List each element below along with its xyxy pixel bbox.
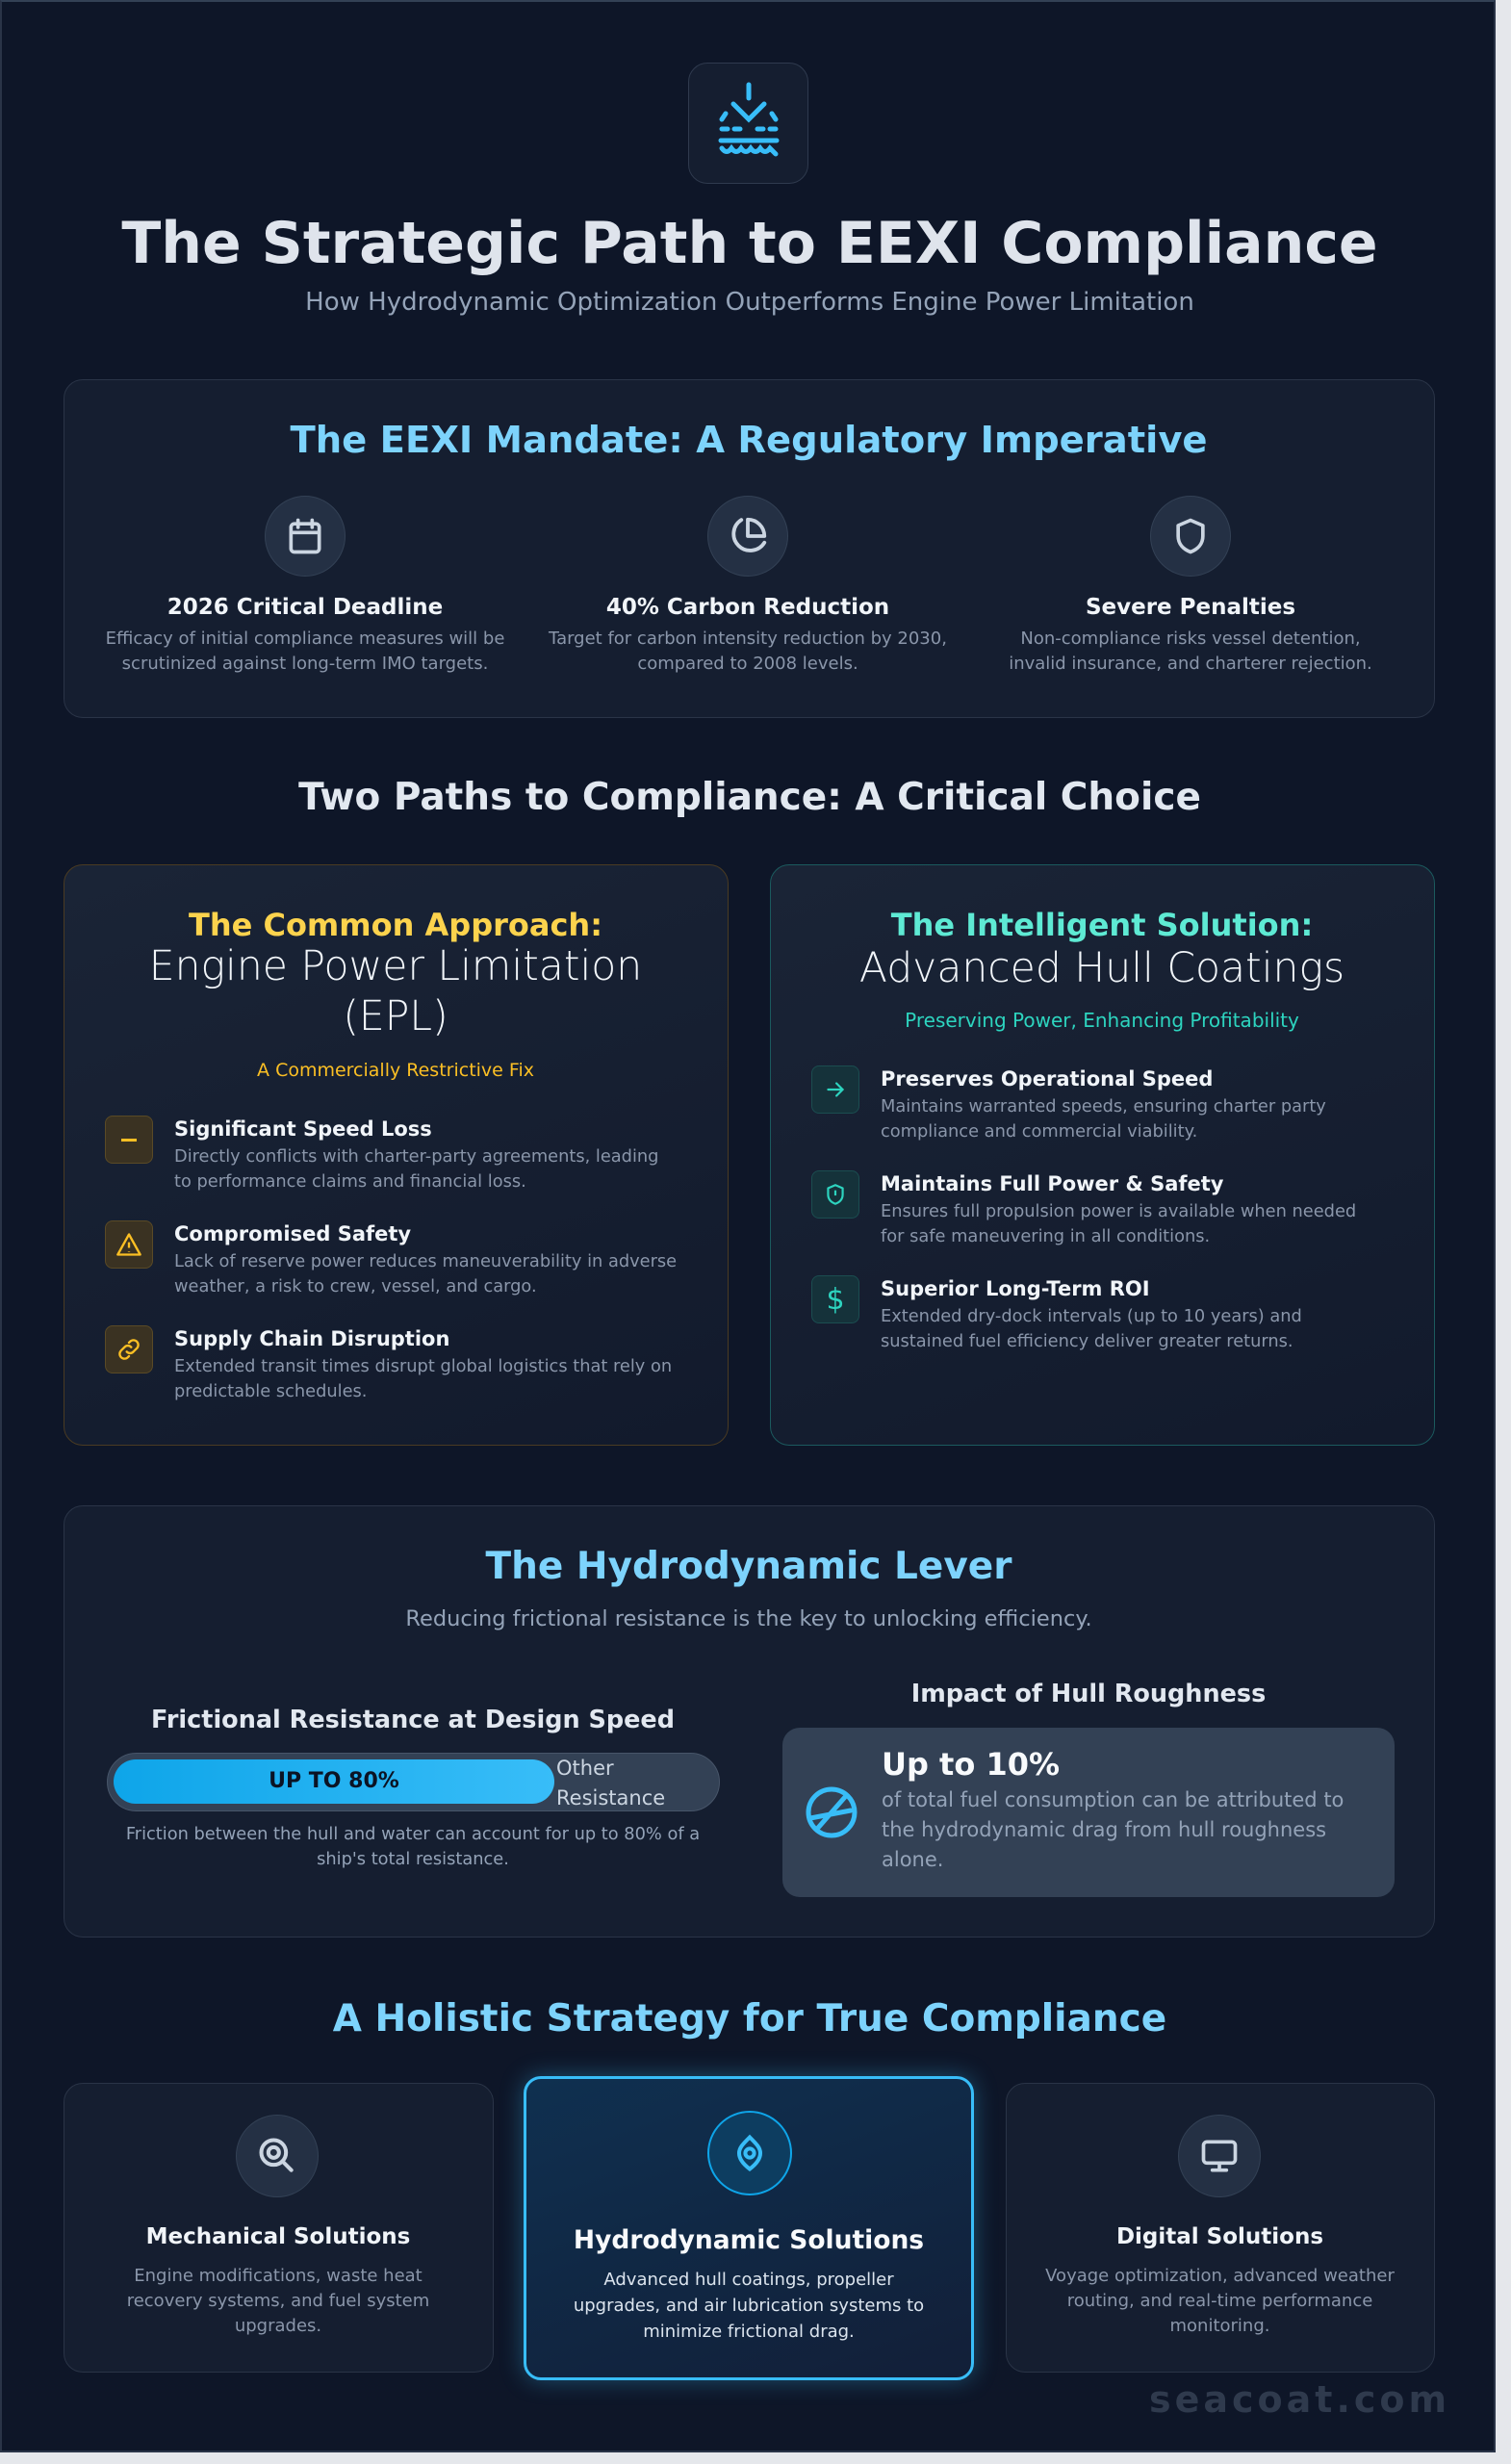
icon: dollar — [811, 1275, 859, 1323]
item: deadline: 2026 Critical Deadline — [167, 595, 443, 620]
item: carbon reduction: 40% Carbon Reduction — [606, 595, 889, 620]
chart: frictional resistance bar: Frictional Resistance at Design Speed — [151, 1706, 675, 1734]
item: speed: compliance and commercial viability. — [881, 1121, 1197, 1142]
item: speed: Maintains warranted speeds, ensuring charter party — [881, 1096, 1326, 1116]
panel: EPL: (EPL) — [343, 993, 448, 1040]
icon: slashed circle — [807, 1786, 857, 1838]
item: penalties: Non-compliance risks vessel detention, — [1020, 629, 1361, 649]
icon: shield — [811, 1170, 859, 1219]
item: power safety: Ensures full propulsion power is available when needed — [881, 1201, 1356, 1221]
item: supply chain: Extended transit times disrupt global logistics that rely on — [174, 1356, 672, 1376]
heading: two paths: Two Paths to Compliance: A Critical Choice — [298, 776, 1201, 819]
item: penalties — [1009, 496, 1372, 674]
card: hydrodynamic highlighted: Hydrodynamic Solutions — [574, 2225, 924, 2255]
icon: dollar: $ — [826, 1282, 845, 1317]
callout: hull roughness: alone. — [882, 1848, 943, 1871]
panel: EEXI mandate — [64, 379, 1435, 718]
item: safety: weather, a risk to crew, vessel, and cargo. — [174, 1276, 537, 1296]
item: safety: Compromised Safety — [174, 1222, 411, 1245]
panel: EPL: Engine Power Limitation — [149, 943, 642, 990]
icon: arrow — [811, 1065, 859, 1114]
panel: EPL: The Common Approach: — [189, 907, 602, 943]
item: supply chain: predictable schedules. — [174, 1381, 367, 1401]
item: carbon reduction: compared to 2008 levels. — [637, 654, 858, 674]
icon: warning — [105, 1220, 153, 1269]
panel: hull coatings: Advanced Hull Coatings — [859, 945, 1345, 992]
item: ROI: Extended dry-dock intervals (up to 10 years) and — [881, 1306, 1302, 1326]
panel: EPL — [64, 864, 729, 1446]
callout: hull roughness — [782, 1680, 1395, 1897]
card: mechanical: upgrades. — [235, 2316, 321, 2336]
card: digital: Digital Solutions — [1116, 2224, 1323, 2249]
item: safety: Lack of reserve power reduces maneuverability in adverse — [174, 1251, 677, 1271]
item: speed loss — [105, 1116, 658, 1192]
card: digital — [1006, 2083, 1435, 2373]
watermark: seacoat.com — [1149, 2378, 1450, 2421]
item: speed loss: Directly conflicts with charter-party agreements, leading — [174, 1146, 658, 1167]
heading: mandate: The EEXI Mandate: A Regulatory Imperative — [290, 419, 1208, 462]
item: supply chain: Supply Chain Disruption — [174, 1327, 449, 1350]
item: power safety: Maintains Full Power & Safety — [881, 1172, 1224, 1195]
chart: frictional resistance bar — [107, 1706, 720, 1869]
chart: frictional resistance bar: Resistance — [556, 1786, 665, 1810]
heading: holistic strategy: A Holistic Strategy for True Compliance — [333, 1997, 1166, 2040]
card: mechanical: Engine modifications, waste heat — [134, 2266, 423, 2286]
icon: search gear — [236, 2115, 319, 2197]
card: digital: routing, and real-time performance — [1067, 2291, 1372, 2311]
item: deadline — [106, 496, 504, 674]
chart: frictional resistance bar: UP TO 80% — [269, 1769, 399, 1793]
card: hydrodynamic highlighted — [524, 2076, 974, 2380]
subtitle: How Hydrodynamic Optimization Outperforms Engine Power Limitation — [305, 288, 1194, 317]
item: speed loss: to performance claims and financial loss. — [174, 1171, 526, 1192]
item: ROI — [811, 1275, 1302, 1351]
card: digital: monitoring. — [1170, 2316, 1269, 2336]
item: ROI: Superior Long-Term ROI — [881, 1277, 1150, 1300]
callout: hull roughness: the hydrodynamic drag from hull roughness — [882, 1818, 1326, 1841]
card: mechanical: recovery systems, and fuel system — [127, 2291, 429, 2311]
item: speed: Preserves Operational Speed — [881, 1067, 1213, 1091]
panel: hull coatings — [770, 864, 1435, 1446]
item: carbon reduction: Target for carbon intensity reduction by 2030, — [549, 629, 947, 649]
callout: hull roughness: Up to 10% — [882, 1746, 1060, 1783]
panel: hull coatings: Preserving Power, Enhancing Profitability — [905, 1009, 1299, 1032]
icon: calendar — [265, 496, 346, 577]
item: supply chain — [105, 1325, 672, 1401]
panel: hydrodynamic lever: The Hydrodynamic Lever — [486, 1545, 1012, 1588]
icon: shield — [1150, 496, 1231, 577]
callout: hull roughness: Impact of Hull Roughness — [911, 1680, 1266, 1708]
card: hydrodynamic highlighted: upgrades, and air lubrication systems to — [574, 2296, 924, 2316]
icon: hull logo — [688, 63, 808, 184]
icon: minus — [105, 1116, 153, 1164]
item: speed loss: Significant Speed Loss — [174, 1117, 432, 1141]
panel: hull coatings: The Intelligent Solution: — [891, 907, 1313, 943]
card: mechanical: Mechanical Solutions — [146, 2224, 410, 2249]
item: carbon reduction — [549, 496, 947, 674]
panel: hydrodynamic lever: Reducing frictional resistance is the key to unlocking efficiency. — [405, 1606, 1092, 1631]
callout: hull roughness: of total fuel consumption can be attributed to — [882, 1788, 1344, 1811]
item: power safety — [811, 1170, 1356, 1246]
panel: hydrodynamic lever — [64, 1505, 1435, 1938]
chart: frictional resistance bar: Friction between the hull and water can account for up to 80% of a — [126, 1824, 700, 1844]
icon: pie chart — [707, 496, 788, 577]
card: mechanical — [64, 2083, 494, 2373]
item: deadline: scrutinized against long-term IMO targets. — [122, 654, 488, 674]
panel: EPL: A Commercially Restrictive Fix — [257, 1060, 534, 1081]
card: hydrodynamic highlighted: Advanced hull coatings, propeller — [603, 2270, 894, 2290]
item: penalties: invalid insurance, and charterer rejection. — [1009, 654, 1372, 674]
item: penalties: Severe Penalties — [1086, 595, 1295, 620]
item: power safety: for safe maneuvering in all conditions. — [881, 1226, 1210, 1246]
title: The Strategic Path to EEXI Compliance — [121, 210, 1378, 277]
icon: monitor — [1178, 2115, 1261, 2197]
item: speed — [811, 1065, 1326, 1142]
card: hydrodynamic highlighted: minimize frictional drag. — [643, 2322, 855, 2342]
icon: target eye — [707, 2111, 792, 2195]
chart: frictional resistance bar: Other — [556, 1757, 614, 1780]
item: deadline: Efficacy of initial compliance measures will be — [106, 629, 504, 649]
card: digital: Voyage optimization, advanced weather — [1045, 2266, 1395, 2286]
item: safety — [105, 1220, 677, 1296]
item: ROI: sustained fuel efficiency deliver greater returns. — [881, 1331, 1293, 1351]
icon: link — [105, 1325, 153, 1373]
chart: frictional resistance bar: ship's total resistance. — [317, 1849, 509, 1869]
